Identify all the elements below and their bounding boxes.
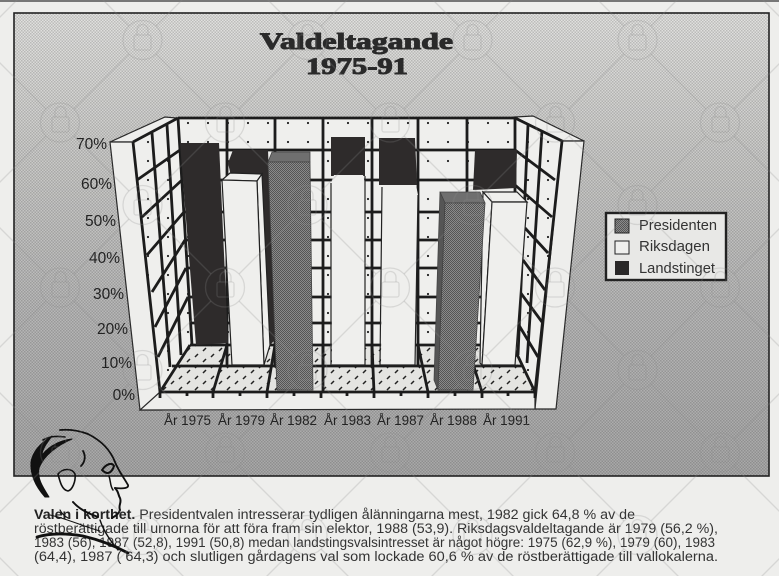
title [260,29,453,79]
legend labels: Riksdagen [639,238,710,255]
panel: shaded chart background [14,13,769,476]
caption text: 1983 (56), 1987 (52,8), 1991 (50,8) medan landstingsvalsintresset är något högre: 1975 (62,9 %), 1979 (60), 1983 [34,535,715,550]
icon: portrait sketch of a man in profile [31,430,128,553]
3D bar chart [76,116,584,428]
legend [606,213,726,280]
bar: Riksdagen 1991 [480,192,527,365]
caption text: Valen i korthet. Presidentvalen intresserar tydligen ålänningarna mest, 1982 gick 64,8 % av de [34,507,635,522]
y-axis labels: 70% [76,136,107,153]
legend labels: Presidenten [639,217,717,234]
legend labels [639,217,717,277]
x-axis labels: År 1991 [483,412,530,428]
bar: Presidenten 1988 [434,192,485,390]
legend labels: Landstinget [639,260,716,277]
y-axis labels: 60% [81,176,112,193]
chart frame [110,116,584,410]
legend swatch: Riksdagen [615,241,629,254]
scan edge at the top [0,0,779,2]
caption text: (64,4), 1987 ( 64,3) och slutligen gårdagens val som lockade 60,6 % av de röstberättigade till vallokalerna. [34,549,718,564]
bar: Presidenten 1982 [268,152,313,390]
y-axis labels: 0% [113,387,135,404]
x-axis labels: År 1988 [430,412,477,428]
bar: Riksdagen 1979 [222,173,270,365]
bar: Landstinget 1991 [473,150,517,190]
bar: Riksdagen 1983 [331,175,365,365]
bar: Landstinget 1979 [228,150,275,345]
x-axis labels: År 1979 [218,412,265,428]
legend swatch: Presidenten [615,219,629,233]
x-axis labels: År 1975 [164,412,211,428]
bar: Landstinget 1987 [379,138,417,185]
legend swatch: Landstinget [615,261,629,275]
caption text: röstberättigade till urnorna för att föra fram sin elektor, 1988 (53,9). Riksdagsvaldeltagande är 1979 (56,2 %), [34,521,718,536]
walls and floor [133,118,562,392]
y-axis labels: 30% [93,286,124,303]
bar: Riksdagen 1987 [380,185,418,365]
caption text [34,507,718,564]
x-axis labels [164,412,530,428]
title: Valdeltagande [260,29,453,54]
y-axis labels: 40% [89,250,120,267]
y-axis labels [76,136,135,404]
x-axis labels: År 1983 [324,412,371,428]
bar: Landstinget 1975 [180,143,228,345]
y-axis labels: 10% [101,355,132,372]
y-axis labels: 50% [85,213,116,230]
grid lines [133,118,562,398]
title: 1975-91 [306,54,408,79]
bar: Landstinget 1983 [331,137,365,176]
x-axis labels: År 1982 [270,412,317,428]
y-axis labels: 20% [97,321,128,338]
x-axis labels: År 1987 [377,412,424,428]
